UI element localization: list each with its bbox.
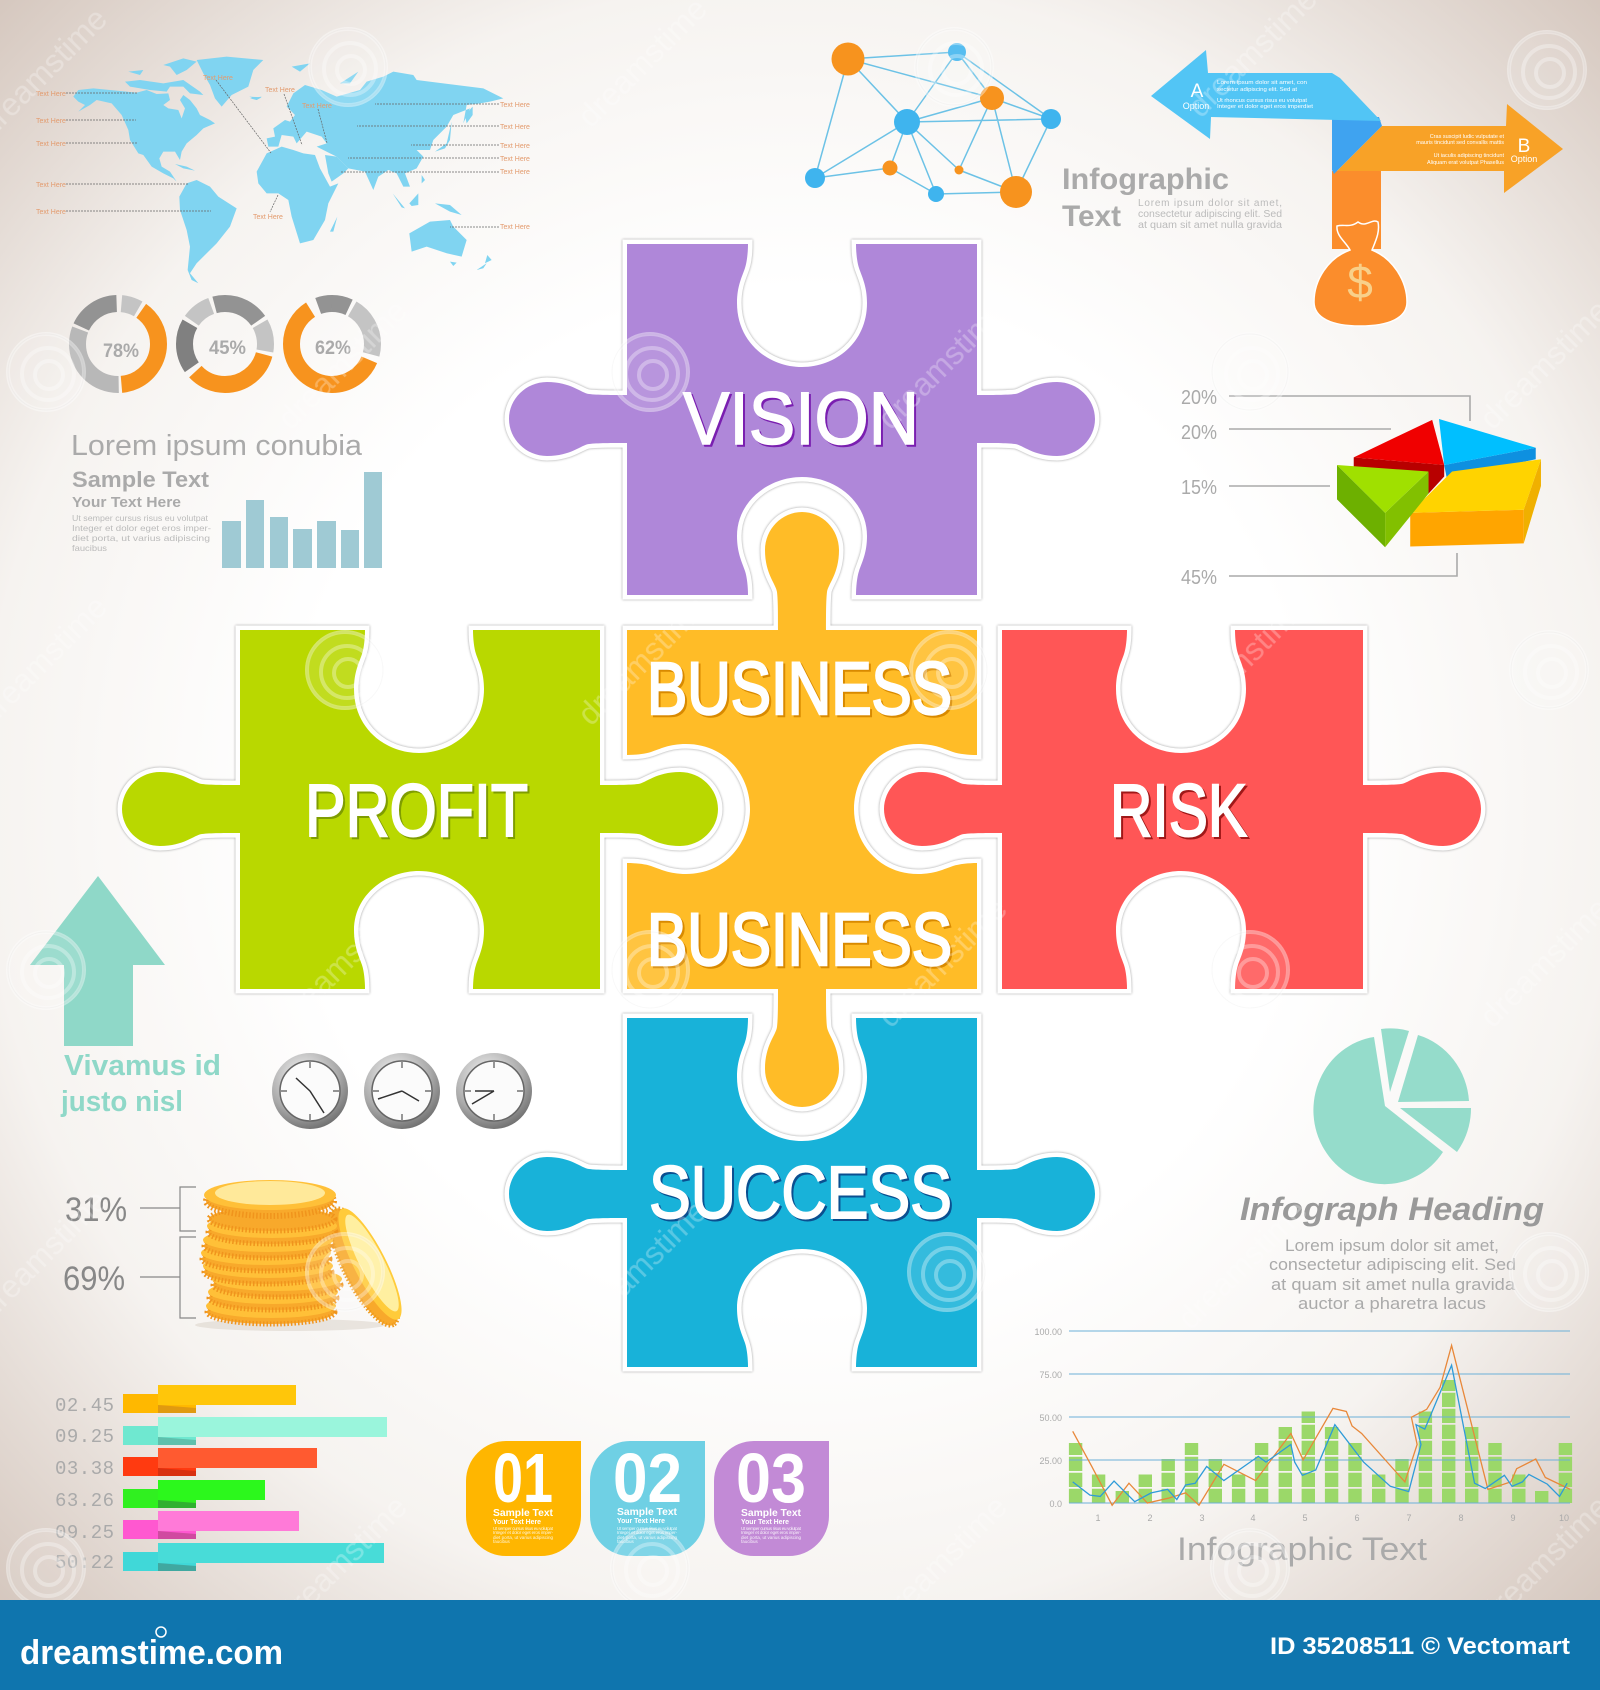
bar row 1 <box>123 1385 296 1413</box>
ribbon bar list: 02.45 <box>55 1395 114 1417</box>
donut 62%: 62% <box>315 338 351 359</box>
pie chart: teal <box>1313 1028 1471 1184</box>
icon: clock 1 <box>272 1053 348 1129</box>
puzzle piece: vision: VISION <box>683 377 919 460</box>
puzzle piece: business <box>627 512 977 1107</box>
bar row 2 <box>123 1417 387 1445</box>
world map with callouts: Text Here <box>203 75 233 82</box>
combo chart: 9 <box>1510 1513 1516 1523</box>
world map with callouts: Text Here <box>500 224 530 231</box>
3D pie chart with callouts: 15% <box>1181 477 1217 499</box>
numbered tag 03: Your Text Here <box>741 1519 789 1526</box>
numbered tag 03: diet porta, ut varius adipiscing <box>741 1535 801 1540</box>
puzzle piece: vision: VISION <box>685 379 921 462</box>
icon: money bag <box>1314 221 1407 326</box>
arrow: option A: Integer et dolor eget eros imperdiet <box>1217 104 1314 110</box>
world map with callouts: Text Here <box>36 182 66 189</box>
world map with callouts: Text Here <box>36 209 66 216</box>
coin stack with percentages <box>63 1180 412 1334</box>
arrow: option B: Option <box>1511 154 1537 164</box>
text block: lorem ipsum conubia: Sample Text <box>72 467 210 492</box>
arrow: option A: Ut rhoncus cursus risus eu volutpat <box>1217 98 1307 104</box>
bar chart: teal columns <box>222 472 382 568</box>
world map with callouts: Text Here <box>500 143 530 150</box>
up arrow <box>30 876 165 1046</box>
donut 45%: 45% <box>209 338 246 359</box>
numbered tag 01: Ut semper cursus risus eu volutpat <box>493 1526 554 1531</box>
numbered tag 02: Sample Text <box>617 1507 678 1518</box>
combo chart: 6 <box>1354 1513 1360 1523</box>
text block: infograph heading: consectetur adipiscing elit. Sed <box>1269 1256 1516 1274</box>
arrow: option B: Cras suscipit ludic vulputate et <box>1430 134 1504 140</box>
puzzle piece: vision <box>509 244 1095 595</box>
combo chart: 100.00 <box>1034 1327 1062 1337</box>
world map with callouts: Text Here <box>265 87 295 94</box>
numbered tag 01: Sample Text <box>493 1508 554 1519</box>
logo text: dreamstime.com <box>20 1634 283 1672</box>
puzzle piece: success: SUCCESS <box>649 1151 952 1234</box>
coin stack with percentages: 69% <box>63 1260 125 1298</box>
numbered tag 02: Ut semper cursus risus eu volutpat <box>617 1526 678 1531</box>
leaning coin <box>317 1200 412 1334</box>
icon: clock 2 <box>364 1053 440 1129</box>
world map with callouts: Text Here <box>500 124 530 131</box>
network diagram <box>805 42 1061 208</box>
combo chart: 7 <box>1406 1513 1412 1523</box>
donut 62% <box>292 304 372 384</box>
puzzle piece: business: BUSINESS <box>649 900 954 983</box>
text block: infograph heading: at quam sit amet nulla gravida <box>1271 1276 1516 1294</box>
arrow: option B: Aliquam erat volutpat Phasellus <box>1427 160 1504 166</box>
combo chart: 3 <box>1199 1513 1205 1523</box>
ribbon bar list: 09.25 <box>55 1426 114 1448</box>
numbered tag 03: faucibus <box>741 1539 759 1544</box>
puzzle piece: business: BUSINESS <box>649 649 954 732</box>
arrow: option B <box>1337 104 1563 193</box>
text block: vivamus id justo nisl: justo nisl <box>60 1086 183 1118</box>
bar row 3 <box>123 1448 317 1476</box>
numbered tag 01: faucibus <box>493 1539 511 1544</box>
text block: lorem ipsum conubia: Lorem ipsum conubia <box>71 430 363 462</box>
puzzle piece: success <box>509 1018 1095 1367</box>
image id and credit: ID 35208511 © Vectomart <box>1270 1633 1570 1660</box>
3D pie chart with callouts <box>1181 387 1541 589</box>
3D pie chart with callouts: 45% <box>1181 567 1217 589</box>
world map with callouts: Text Here <box>36 91 66 98</box>
combo chart: 8 <box>1458 1513 1464 1523</box>
arrow: option A: sectetur adipiscing elit. Sed at <box>1217 87 1298 93</box>
combo chart: 4 <box>1250 1513 1256 1523</box>
numbered tag 02: 02 <box>613 1439 682 1517</box>
text block: lorem ipsum conubia <box>71 430 363 553</box>
text block: infographic text: Infographic <box>1062 163 1229 196</box>
bar row 6 <box>123 1543 384 1571</box>
puzzle piece: profit <box>122 630 718 989</box>
puzzle piece: risk: RISK <box>1110 769 1247 852</box>
ribbon bar list: 09.25 <box>55 1522 114 1544</box>
text block: lorem ipsum conubia: faucibus <box>72 543 107 553</box>
donut 78% <box>78 304 158 384</box>
text block: infograph heading <box>1240 1191 1544 1313</box>
numbered tag 03: Sample Text <box>741 1508 802 1519</box>
puzzle piece: risk <box>884 630 1481 989</box>
icon: money bag: $ <box>1347 256 1373 308</box>
text block: vivamus id justo nisl: Vivamus id <box>64 1050 221 1082</box>
3D pie chart with callouts: 20% <box>1181 422 1217 444</box>
icon: clock 3 <box>456 1053 532 1129</box>
combo chart: 75.00 <box>1039 1370 1062 1380</box>
numbered tag 02: diet porta, ut varius adipiscing <box>617 1535 677 1540</box>
arrows with money bag <box>1151 50 1563 326</box>
numbered tag 03: Ut semper cursus risus eu volutpat <box>741 1526 802 1531</box>
arrow: option B: B <box>1518 136 1530 157</box>
combo chart <box>1034 1327 1570 1567</box>
arrow: option A: Option <box>1183 101 1209 111</box>
text block: lorem ipsum conubia: Ut semper cursus risus eu volutpat <box>72 513 209 523</box>
numbered tag 02 <box>590 1439 705 1556</box>
text block: infographic text: at quam sit amet nulla gravida <box>1138 220 1282 231</box>
world map with callouts: Text Here <box>500 169 530 176</box>
clocks <box>272 1053 532 1129</box>
numbered tag 03 <box>714 1439 829 1556</box>
combo chart: Infographic Text <box>1177 1531 1427 1567</box>
combo chart: 10 <box>1559 1513 1569 1523</box>
watermarks: dreamstime <box>870 292 1014 436</box>
watermarks: dreamstime <box>1170 588 1314 732</box>
text block: lorem ipsum conubia: Integer et dolor eget eros imper- <box>72 523 211 533</box>
text block: infograph heading: auctor a pharetra lacus <box>1298 1295 1486 1313</box>
world map with callouts <box>36 57 530 283</box>
watermarks: dreamstime <box>870 1488 1014 1632</box>
arrow: option A: Lorem ipsum dolor sit amet, con <box>1217 80 1307 86</box>
world map with callouts: Text Here <box>500 102 530 109</box>
text block: infograph heading: Infograph Heading <box>1240 1191 1544 1227</box>
puzzle piece: profit: PROFIT <box>307 771 530 854</box>
numbered tag 02: Integer et dolor eget eros imper- <box>617 1530 678 1535</box>
puzzle piece: success: SUCCESS <box>651 1153 954 1236</box>
numbered tag 01: 01 <box>493 1439 553 1517</box>
text block: infographic text: consectetur adipiscing elit. Sed <box>1138 209 1282 220</box>
arrow: option A: A <box>1191 81 1204 102</box>
ribbon bar list: 03.38 <box>55 1458 114 1480</box>
watermarks: dreamstime <box>570 1192 714 1336</box>
world map with callouts: Text Here <box>253 214 283 221</box>
arrow: option B: Ut iaculis adipiscing tincidunt <box>1434 153 1504 159</box>
text block: lorem ipsum conubia: diet porta, ut varius adipiscing <box>72 533 210 543</box>
combo chart: 5 <box>1302 1513 1308 1523</box>
donut 45% <box>184 304 266 384</box>
arrow: orange stem <box>1332 171 1381 249</box>
footer banner <box>0 1600 1600 1690</box>
puzzle piece: risk: RISK <box>1112 771 1249 854</box>
text block: infographic text <box>1062 163 1282 233</box>
text block: infographic text: Lorem ipsum dolor sit amet, <box>1138 198 1282 209</box>
numbered tag 03: 03 <box>736 1439 806 1517</box>
world map with callouts: Text Here <box>36 141 66 148</box>
text block: lorem ipsum conubia: Your Text Here <box>72 494 181 511</box>
combo chart: 2 <box>1147 1513 1153 1523</box>
combo chart: 50.00 <box>1039 1413 1062 1423</box>
puzzle piece: business: BUSINESS <box>647 647 952 730</box>
arrow: option A <box>1151 50 1381 139</box>
puzzle piece: business: BUSINESS <box>647 898 952 981</box>
combo chart: 25.00 <box>1039 1456 1062 1466</box>
text block: infographic text: Text <box>1062 200 1121 233</box>
arrow: blue fold <box>1332 117 1382 174</box>
numbered tag 02: Your Text Here <box>617 1518 665 1525</box>
combo chart: 0.0 <box>1049 1499 1062 1509</box>
ribbon bar list <box>55 1385 387 1574</box>
donut charts <box>78 304 372 384</box>
ribbon bar list: 50:22 <box>55 1552 114 1574</box>
watermarks: dreamstime <box>870 890 1014 1034</box>
coin stack with percentages: 31% <box>65 1191 127 1229</box>
bar row 4 <box>123 1480 265 1508</box>
watermarks: dreamstime <box>270 890 414 1034</box>
donut 78%: 78% <box>103 341 139 362</box>
numbered tag 03: Integer et dolor eget eros imper- <box>741 1530 802 1535</box>
puzzle piece: profit: PROFIT <box>305 769 528 852</box>
numbered tag 01: Your Text Here <box>493 1519 541 1526</box>
numbered tag 01: Integer et dolor eget eros imper- <box>493 1530 554 1535</box>
numbered tag 01 <box>466 1439 581 1556</box>
stacked coins <box>201 1180 342 1324</box>
world map with callouts: Text Here <box>36 118 66 125</box>
africa eurasia and oceania <box>250 63 503 270</box>
watermarks: dreamstime <box>270 292 414 436</box>
3D pie chart with callouts: 20% <box>1181 387 1217 409</box>
combo chart: 1 <box>1095 1513 1101 1523</box>
arrow: option B: mauris tincidunt sed convallis mattis <box>1416 140 1504 146</box>
text block: vivamus id justo nisl <box>60 1050 221 1118</box>
text block: infograph heading: Lorem ipsum dolor sit amet, <box>1285 1237 1499 1255</box>
world map with callouts: Text Here <box>500 156 530 163</box>
watermarks: dreamstime <box>1170 1192 1314 1336</box>
ribbon bar list: 63.26 <box>55 1490 114 1512</box>
numbered tag 01: diet porta, ut varius adipiscing <box>493 1535 553 1540</box>
numbered tag 02: faucibus <box>617 1539 635 1544</box>
world map with callouts: Text Here <box>302 103 332 110</box>
bar row 5 <box>123 1511 299 1539</box>
watermarks: dreamstime <box>270 1488 414 1632</box>
americas and greenland <box>73 57 263 283</box>
watermarks: dreamstime <box>570 588 714 732</box>
